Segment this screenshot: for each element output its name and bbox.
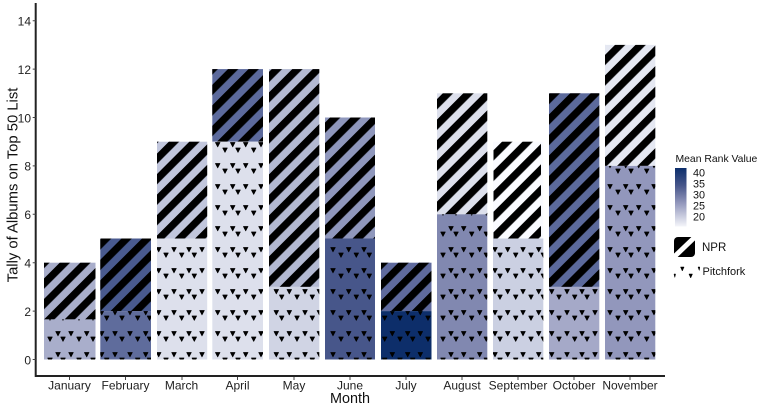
y axis tick labels: 12 <box>18 63 31 77</box>
y axis tick labels: 2 <box>24 305 31 319</box>
legend colour bar labels: 20 <box>693 212 705 224</box>
legend colour bar labels: 30 <box>693 190 705 202</box>
bar: July <box>381 263 432 360</box>
bar: May <box>269 69 319 359</box>
bar: November <box>605 45 655 360</box>
legend colour bar labels: 25 <box>693 200 705 212</box>
bar: April <box>212 69 263 359</box>
bar: June <box>325 118 375 360</box>
x axis tick labels: March <box>165 378 198 392</box>
x axis tick labels: January <box>48 378 91 392</box>
legend colour bar <box>675 168 686 226</box>
legend key: Pitchfork triangles <box>674 267 700 278</box>
y axis tick labels: 10 <box>18 111 31 125</box>
x axis tick labels: May <box>283 378 305 392</box>
legend key: NPR stripes <box>673 236 696 258</box>
legend colour bar labels: 40 <box>693 168 705 180</box>
bar: March <box>157 142 207 360</box>
legend <box>673 154 758 278</box>
x axis tick labels: July <box>395 378 417 392</box>
y axis tick labels: 0 <box>24 353 31 367</box>
bar: August <box>437 93 487 360</box>
bar: January <box>44 263 96 360</box>
y axis tick labels: 6 <box>24 208 31 222</box>
plot axes <box>33 3 665 380</box>
legend colour bar labels: 35 <box>693 178 705 190</box>
y axis tick labels: 4 <box>24 256 31 270</box>
x axis tick labels <box>48 378 658 392</box>
x axis tick labels: June <box>337 378 363 392</box>
bar: October <box>549 93 599 360</box>
x axis tick labels: September <box>489 378 547 392</box>
y axis tick labels: 8 <box>24 160 31 174</box>
bars <box>44 45 655 360</box>
legend label: Pitchfork: Pitchfork <box>702 266 746 278</box>
legend title: Mean Rank Value <box>676 154 758 165</box>
bar: September <box>493 142 543 360</box>
x axis tick labels: February <box>101 378 150 392</box>
bar: February <box>100 238 151 360</box>
legend colour bar labels <box>693 168 705 224</box>
x axis tick labels: November <box>602 378 658 392</box>
x axis tick labels: August <box>443 378 481 392</box>
x axis tick labels: April <box>225 378 250 392</box>
x axis tick labels: October <box>553 378 595 392</box>
y axis tick labels <box>18 14 31 367</box>
y axis tick labels: 14 <box>18 14 31 28</box>
y axis title: Tally of Albums on Top 50 List <box>6 88 22 282</box>
legend label: NPR: NPR <box>702 242 726 254</box>
